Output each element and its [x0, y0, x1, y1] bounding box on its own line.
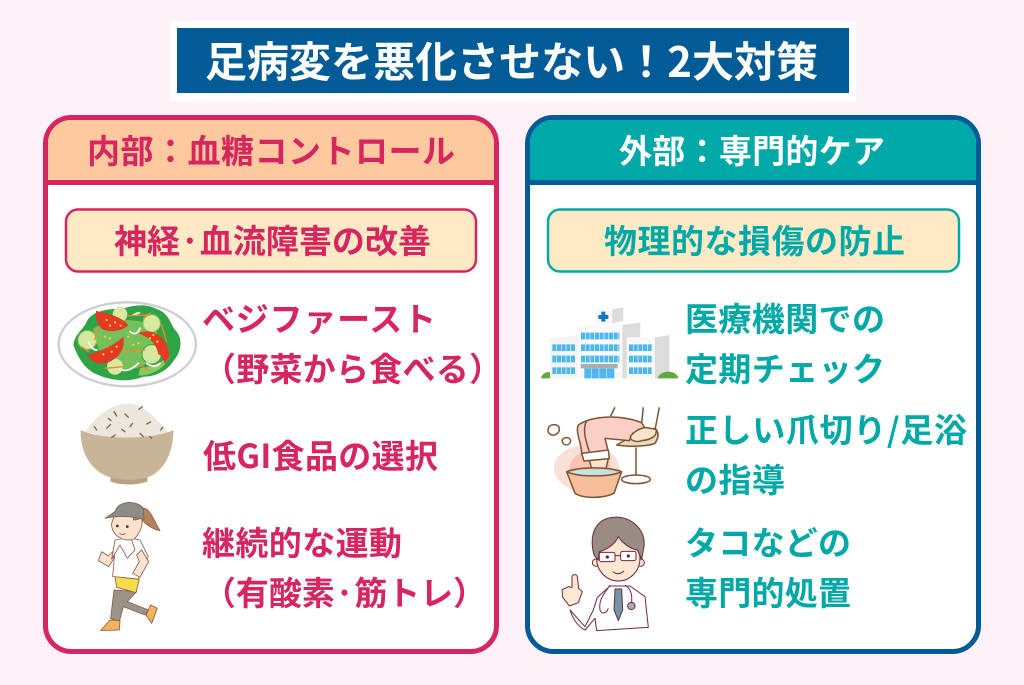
panel: internal blood sugar control	[46, 118, 502, 652]
panel header: internal: 内部：血糖コントロール	[87, 125, 455, 173]
item text: nail cutting and foot bath: 正しい爪切り/足浴	[685, 404, 967, 452]
item text: low GI foods: 低GI食品の選択	[203, 430, 438, 478]
icon: rice bowl	[81, 404, 173, 484]
title banner: 足病変を悪化させない！2大対策	[205, 29, 818, 90]
title banner	[170, 21, 856, 101]
icon: doctor	[562, 517, 648, 631]
icon: hospital	[541, 307, 678, 378]
icon: foot bath	[548, 407, 659, 497]
subheading: nerve and blood flow	[66, 210, 476, 272]
subheading: prevent physical damage	[548, 210, 959, 272]
item text: vegetables first	[202, 293, 502, 391]
icon: jogging woman	[98, 502, 160, 631]
item text: continued exercise: 継続的な運動	[202, 517, 402, 565]
item text: nail cutting and foot bath	[685, 404, 967, 502]
item text: vegetables first: ベジファースト	[202, 293, 436, 341]
item text: continued exercise	[202, 517, 486, 615]
subheading: nerve and blood flow: 神経·血流障害の改善	[114, 215, 431, 263]
item text: regular medical check: 定期チェック	[685, 343, 885, 391]
item text: regular medical check	[685, 293, 885, 391]
item text: corn treatment: 専門的処置	[685, 567, 851, 615]
subheading: prevent physical damage: 物理的な損傷の防止	[604, 215, 905, 263]
panel header: external: 外部：専門的ケア	[619, 125, 885, 173]
item text: vegetables first: （野菜から食べる）	[203, 343, 502, 391]
item text: corn treatment: タコなどの	[685, 517, 851, 565]
item text: nail cutting and foot bath: の指導	[685, 454, 785, 502]
icon: salad	[59, 302, 196, 386]
item text: continued exercise: （有酸素·筋トレ）	[203, 567, 486, 615]
item text: corn treatment	[685, 517, 851, 615]
panel header: external	[528, 120, 978, 185]
item text: regular medical check: 医療機関での	[685, 293, 885, 341]
panel: external professional care	[528, 118, 978, 652]
panel header: internal	[46, 120, 496, 185]
